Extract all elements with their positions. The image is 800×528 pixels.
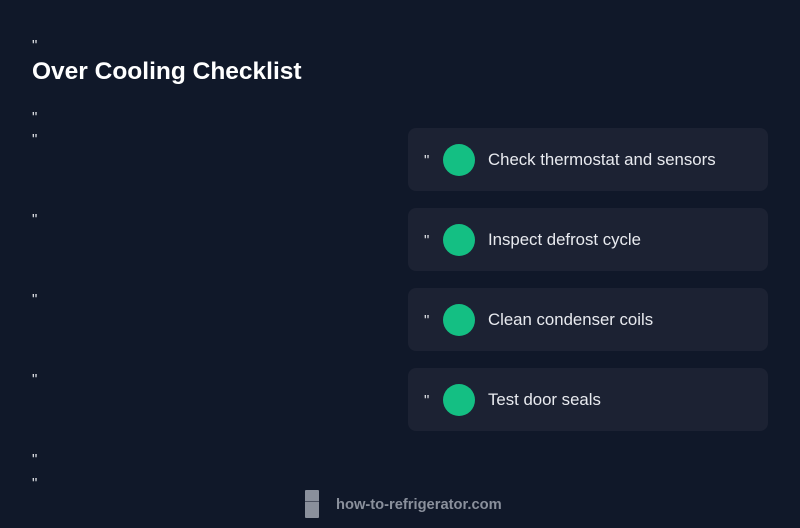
text: "	[32, 37, 37, 54]
text: "	[32, 211, 37, 228]
card: door seals: "	[424, 392, 429, 409]
card: condenser	[408, 288, 768, 351]
card: door seals: Test door seals	[488, 390, 601, 409]
text: "	[32, 475, 37, 492]
icon: fridge	[305, 490, 319, 518]
footer text: how-to-refrigerator.com	[336, 497, 502, 513]
text: "	[32, 451, 37, 468]
card: door seals	[408, 368, 768, 431]
card: defrost: Inspect defrost cycle	[488, 230, 641, 249]
card: condenser: Clean condenser coils	[488, 310, 653, 329]
card: thermostat: "	[424, 152, 429, 169]
text: "	[32, 109, 37, 126]
card: thermostat	[408, 128, 768, 191]
text: "	[32, 131, 37, 148]
text: "	[32, 291, 37, 308]
card: defrost: "	[424, 232, 429, 249]
card: condenser: "	[424, 312, 429, 329]
card: thermostat: Check thermostat and sensors	[488, 150, 716, 169]
text: "	[32, 371, 37, 388]
title: Over Cooling Checklist	[32, 58, 302, 85]
card: defrost	[408, 208, 768, 271]
